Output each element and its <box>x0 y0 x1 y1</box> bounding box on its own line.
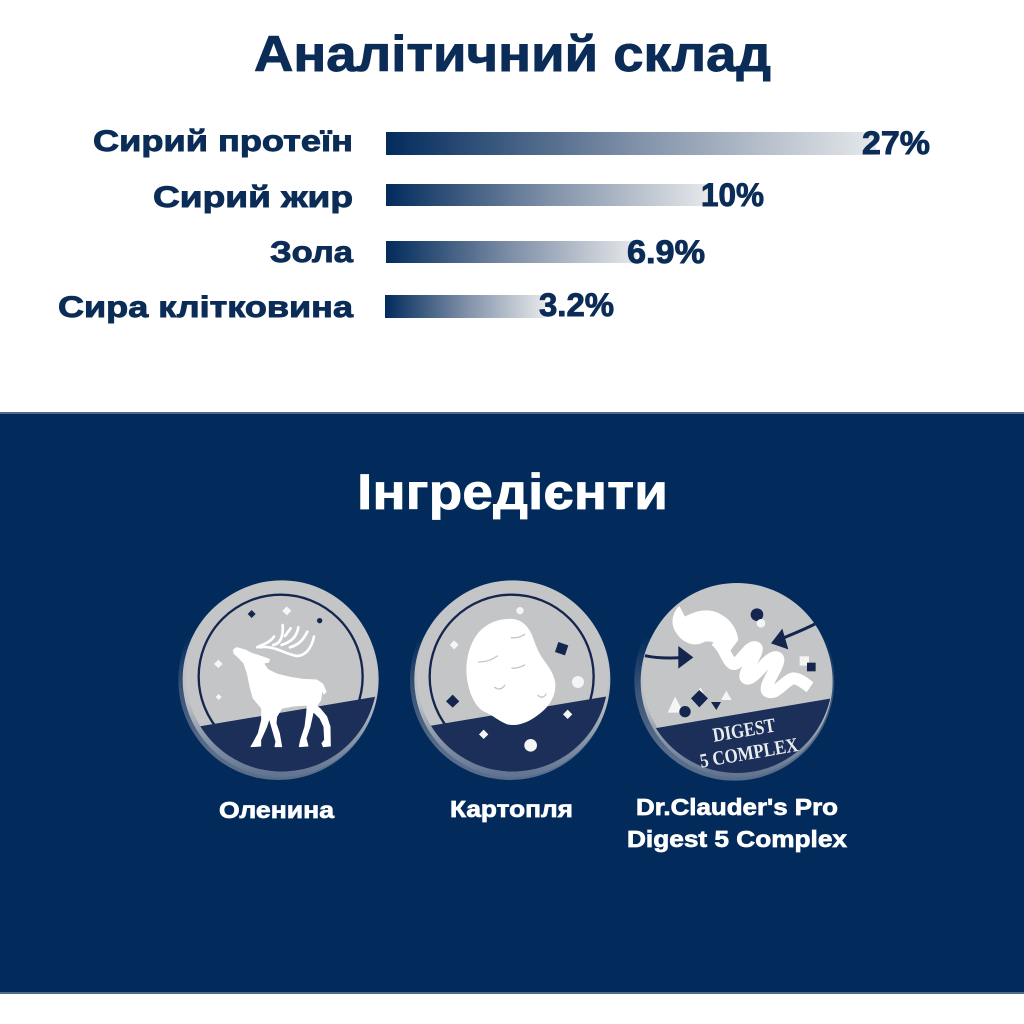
label: potato: Картопля <box>450 796 573 822</box>
row: crude fat: Сирий жир <box>153 181 353 214</box>
complex subtitle text: 5 COMPLEX <box>698 734 800 773</box>
title: analytical composition: Аналітичний склад <box>254 26 771 82</box>
label: venison: Оленина <box>219 797 334 823</box>
bar chart: analytical composition <box>58 125 930 324</box>
row: crude fat <box>153 177 764 214</box>
row: crude fibre <box>58 287 614 324</box>
icon: digest 5 complex <box>634 583 834 781</box>
row: crude fibre: Сира клітковина <box>58 291 353 324</box>
icon: deer <box>178 580 379 780</box>
row: crude protein <box>93 125 930 161</box>
heading: ingredients: Інгредієнти <box>357 464 668 520</box>
row: ash: 6.9% <box>627 234 705 270</box>
panel: ingredients <box>0 412 1024 994</box>
row: crude protein: Сирий протеїн <box>93 125 353 158</box>
row: crude protein: 27% <box>862 125 930 161</box>
row: crude fibre: 3.2% <box>539 287 614 323</box>
complex name text: DIGEST <box>711 714 778 747</box>
label: Dr.Clauder's complex: Dr.Clauder's Pro <box>636 794 838 820</box>
row: ash <box>270 234 705 270</box>
icon: potato <box>410 580 610 780</box>
row: crude fat: 10% <box>701 177 764 213</box>
row: ash: Зола <box>270 236 353 269</box>
label: Dr.Clauder's complex: Digest 5 Complex <box>627 826 847 852</box>
label: Dr.Clauder's complex <box>627 794 847 852</box>
